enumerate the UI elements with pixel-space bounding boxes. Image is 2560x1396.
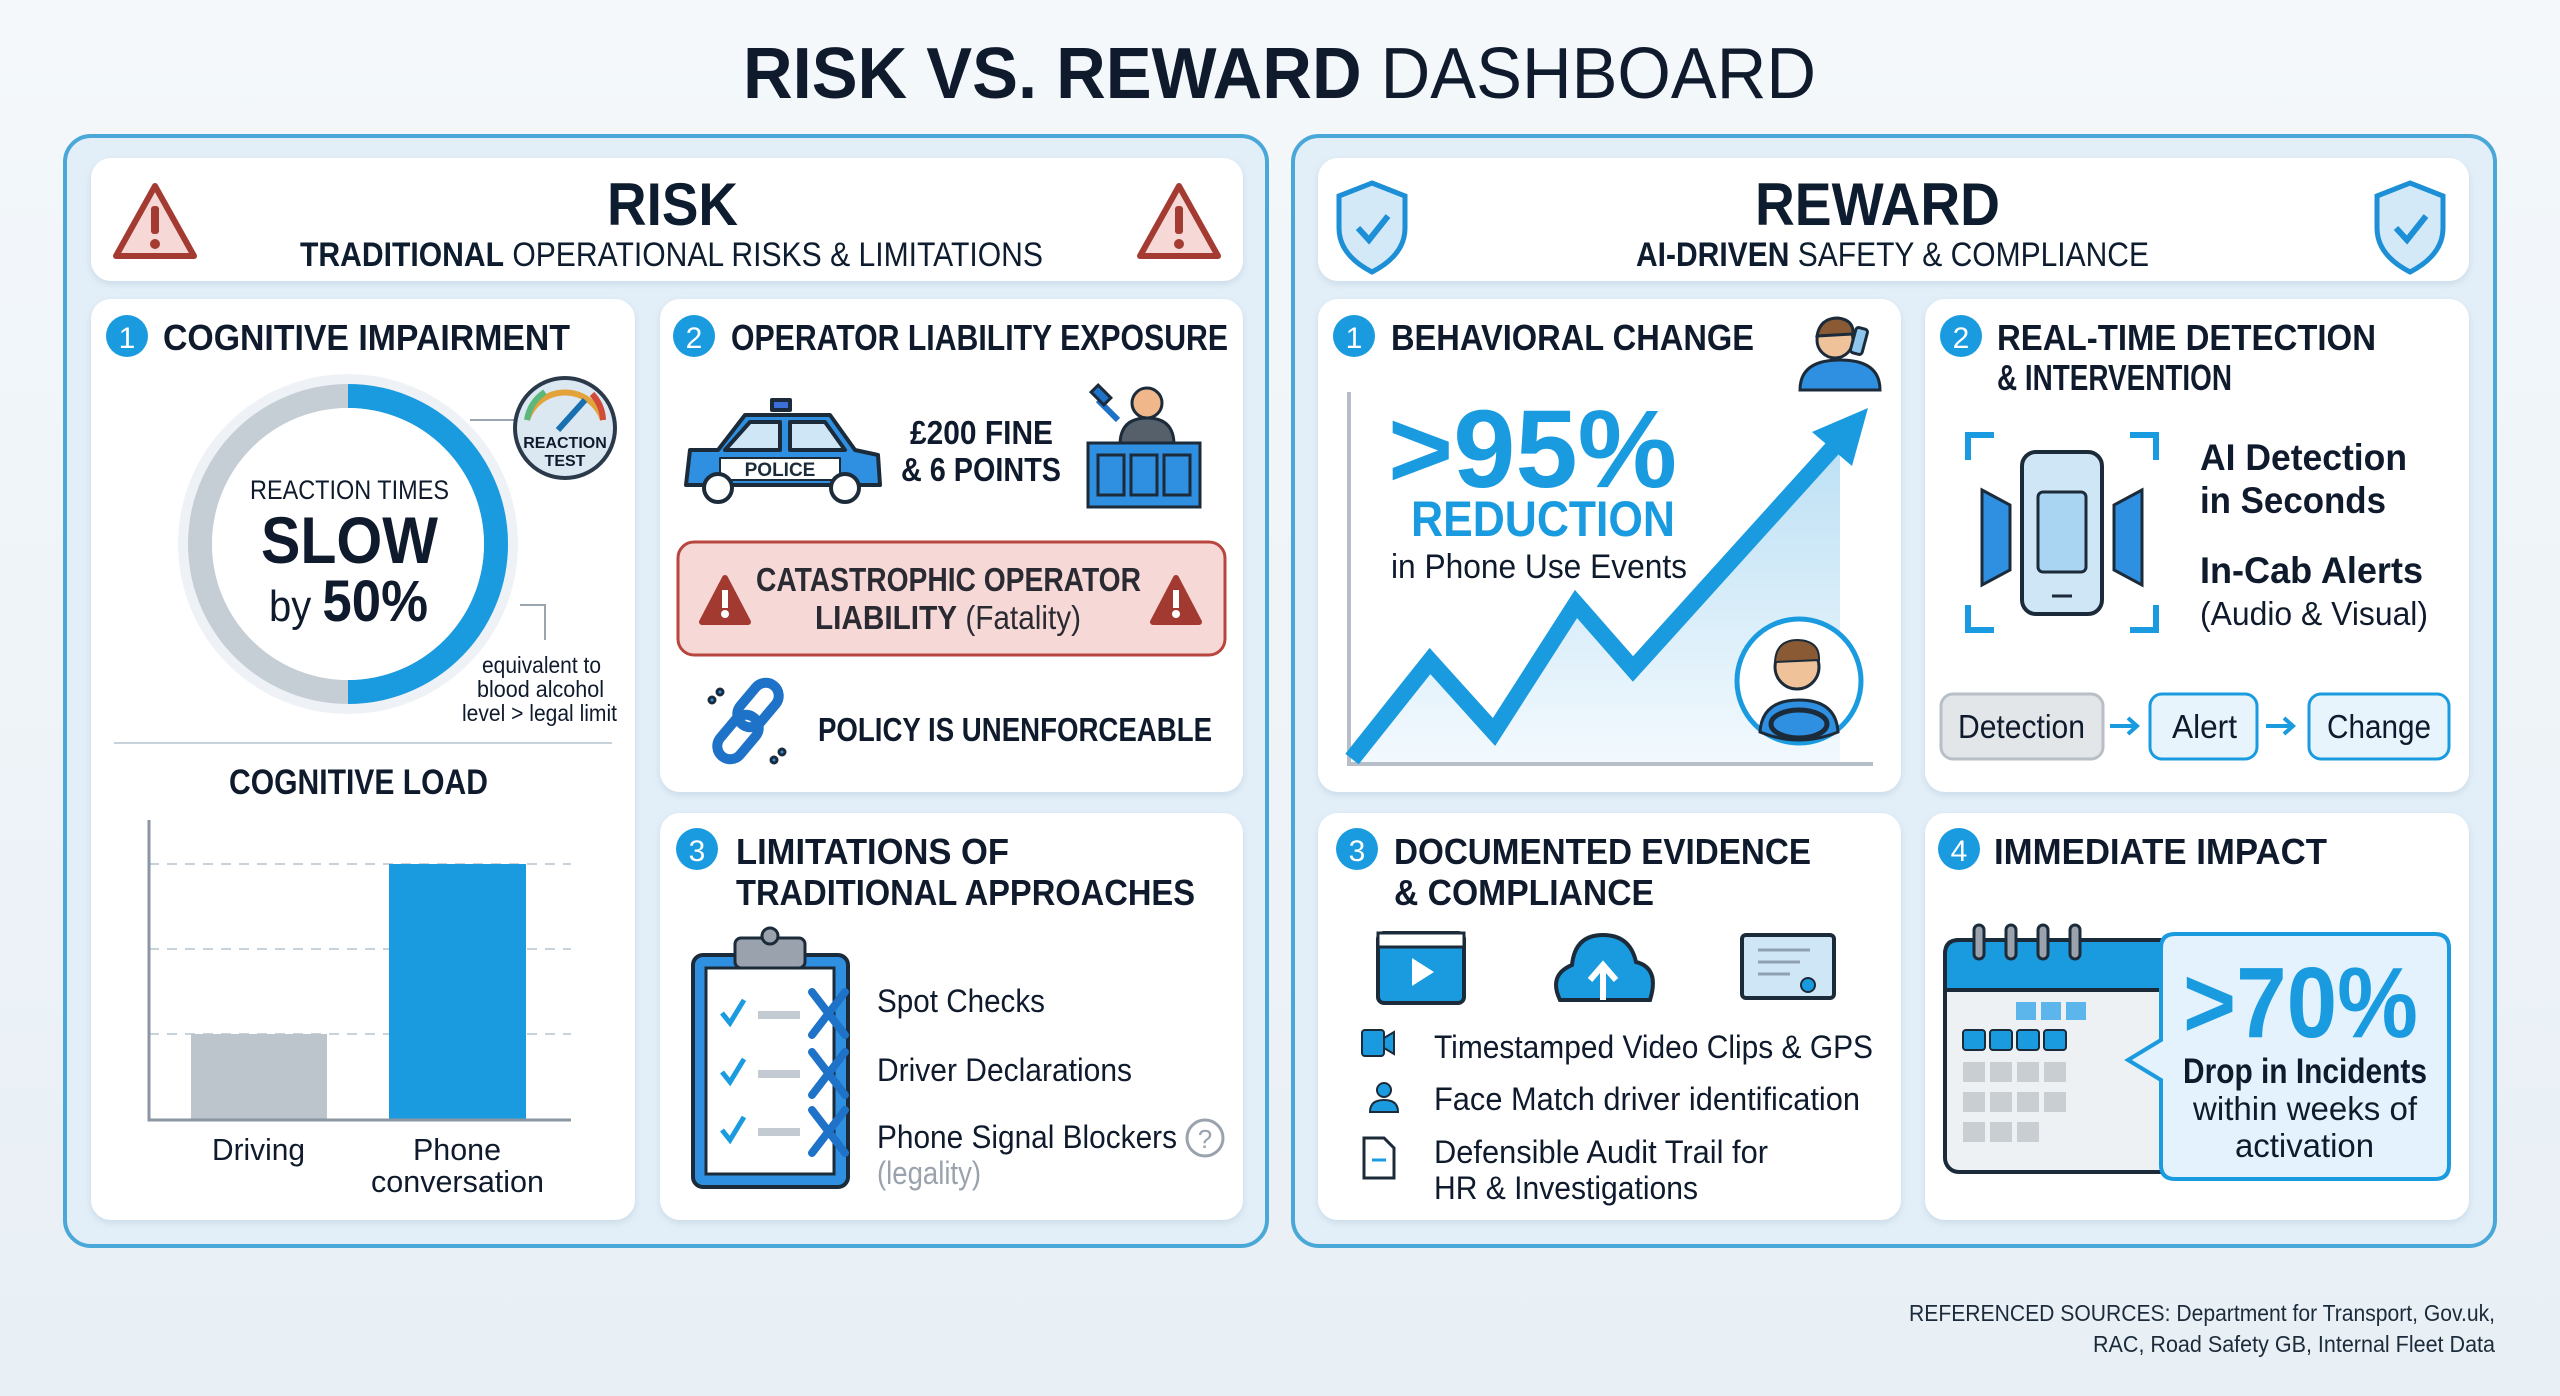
risk header [91,158,1243,281]
list: traditional approaches: Driver Declarations [877,1052,1132,1088]
heading: IMMEDIATE IMPACT [1994,831,2327,872]
badge 4: 4 [1951,835,1967,868]
badge 2 [673,315,715,357]
text: detection features: AI Detection [2200,437,2407,478]
heading: BEHAVIORAL CHANGE [1391,317,1754,358]
card: documented evidence [1318,813,1901,1220]
stat: 95% [1388,388,1687,586]
list: evidence: Timestamped Video Clips & GPS [1434,1029,1873,1065]
flow: detection alert change [1941,694,2449,759]
list: traditional approaches: (legality) [877,1155,981,1191]
stat: 95%: REDUCTION [1411,491,1675,547]
list: traditional approaches [877,983,1223,1191]
text: detection features: in Seconds [2200,480,2386,521]
icon: judge [1088,385,1200,507]
note: blood alcohol [462,605,618,726]
callout: catastrophic liability: CATASTROPHIC OPERATOR [756,561,1141,598]
list: evidence: Defensible Audit Trail for [1434,1134,1768,1170]
icon: certificate [1742,935,1834,998]
subtitle: TRADITIONAL OPERATIONAL RISKS & LIMITATIONS [300,236,1043,274]
list: evidence: Face Match driver identification [1434,1081,1860,1117]
bar chart: conversation [371,1164,544,1199]
badge 2: 2 [686,322,702,355]
list: traditional approaches: ? [1198,1124,1212,1154]
list: evidence: HR & Investigations [1434,1170,1698,1206]
bar chart: Driving [212,1132,305,1167]
panel: risk [65,136,1267,1246]
icon: happy driver [1737,619,1861,743]
badge 1 [106,315,148,357]
badge 1: 1 [1346,322,1362,355]
flow: detection alert change: Detection [1958,708,2085,745]
list: evidence [1362,1029,1873,1206]
callout: 70%: >70% [2183,947,2418,1059]
card: behavioral change [1318,299,1901,792]
chart: upward trend [1349,392,1873,764]
icon: phone detection [1968,435,2156,630]
badge 1: 1 [119,322,135,355]
badge 3: 3 [689,835,705,868]
heading: LIMITATIONS OF [736,831,1009,872]
badge 3 [676,828,718,870]
title: RISK VS. REWARD DASHBOARD [743,34,1816,114]
card: immediate impact [1925,813,2469,1220]
badge 2 [1940,315,1982,357]
icon: shield right [2377,183,2443,272]
heading: COGNITIVE IMPAIRMENT [163,317,570,358]
heading: TRADITIONAL APPROACHES [736,872,1195,913]
heading: REAL-TIME DETECTION [1997,317,2376,358]
icon: broken chain [709,677,785,765]
text: detection features [2200,437,2428,632]
card: real-time detection [1925,299,2469,792]
card: limitations [660,813,1243,1220]
donut: SLOW [261,503,439,577]
note: blood alcohol: level > legal limit [462,700,618,726]
text: fine [901,414,1061,488]
card: cognitive impairment [91,299,635,1220]
bar chart [149,820,571,1199]
sources: RAC, Road Safety GB, Internal Fleet Data [2093,1331,2495,1357]
text: detection features: (Audio & Visual) [2200,595,2428,632]
stat: 95%: >95% [1388,388,1677,511]
icon: clipboard [693,928,848,1187]
reward header [1318,158,2469,281]
callout: 70%: within weeks of [2192,1090,2418,1127]
icon: reaction test gauge [470,378,615,478]
icon: video [1378,933,1464,1003]
icon: warning right [1140,186,1218,256]
heading: OPERATOR LIABILITY EXPOSURE [731,317,1228,358]
bar chart: Phone [413,1132,501,1167]
callout: catastrophic liability: LIABILITY (Fatality) [815,599,1081,636]
icon: person on phone [1800,318,1880,390]
text: fine: & 6 POINTS [901,451,1061,488]
badge 3: 3 [1349,835,1365,868]
heading: cognitive load: COGNITIVE LOAD [229,763,488,802]
sources: REFERENCED SOURCES: Department for Transport, Gov.uk, [1909,1300,2495,1326]
heading: reward: REWARD [1755,171,2000,238]
flow: detection alert change: Alert [2172,708,2237,745]
flow: detection alert change: Change [2327,708,2431,745]
donut [178,374,518,714]
icon: police car [686,400,880,502]
icon: reaction test gauge: REACTION [523,435,607,452]
badge 2: 2 [1953,322,1969,355]
icon: police car: POLICE [745,460,815,481]
heading: risk: RISK [607,171,738,238]
callout: catastrophic liability [678,542,1225,655]
stat: 95%: in Phone Use Events [1391,548,1687,586]
subtitle: AI-DRIVEN SAFETY & COMPLIANCE [1636,236,2149,274]
icon: calendar [1945,925,2180,1172]
icon: cloud upload [1556,935,1653,1000]
sources [1909,1300,2495,1357]
icon: shield left [1339,183,1405,272]
heading: DOCUMENTED EVIDENCE [1394,831,1811,872]
callout: 70%: activation [2235,1127,2374,1164]
list: traditional approaches: Phone Signal Blockers [877,1119,1177,1155]
note: blood alcohol: blood alcohol [477,676,604,702]
text: unenforceable: POLICY IS UNENFORCEABLE [818,711,1212,748]
heading [1997,317,2376,398]
heading: & COMPLIANCE [1394,872,1654,913]
icon: warning left [116,186,194,256]
badge 3 [1336,828,1378,870]
list: traditional approaches: Spot Checks [877,983,1045,1019]
badge 1 [1333,315,1375,357]
heading: & INTERVENTION [1997,357,2232,398]
panel: reward [1293,136,2495,1246]
donut: by 50% [269,569,428,634]
note: blood alcohol: equivalent to [482,652,601,678]
text: fine: £200 FINE [910,414,1053,451]
donut: REACTION TIMES [250,475,449,505]
callout: 70%: Drop in Incidents [2183,1052,2427,1091]
icon: reaction test gauge: TEST [545,453,586,470]
heading [1394,831,1811,913]
heading [736,831,1195,913]
callout: 70% [2128,934,2449,1179]
text: detection features: In-Cab Alerts [2200,550,2423,591]
badge 4 [1938,828,1980,870]
card: operator liability [660,299,1243,792]
